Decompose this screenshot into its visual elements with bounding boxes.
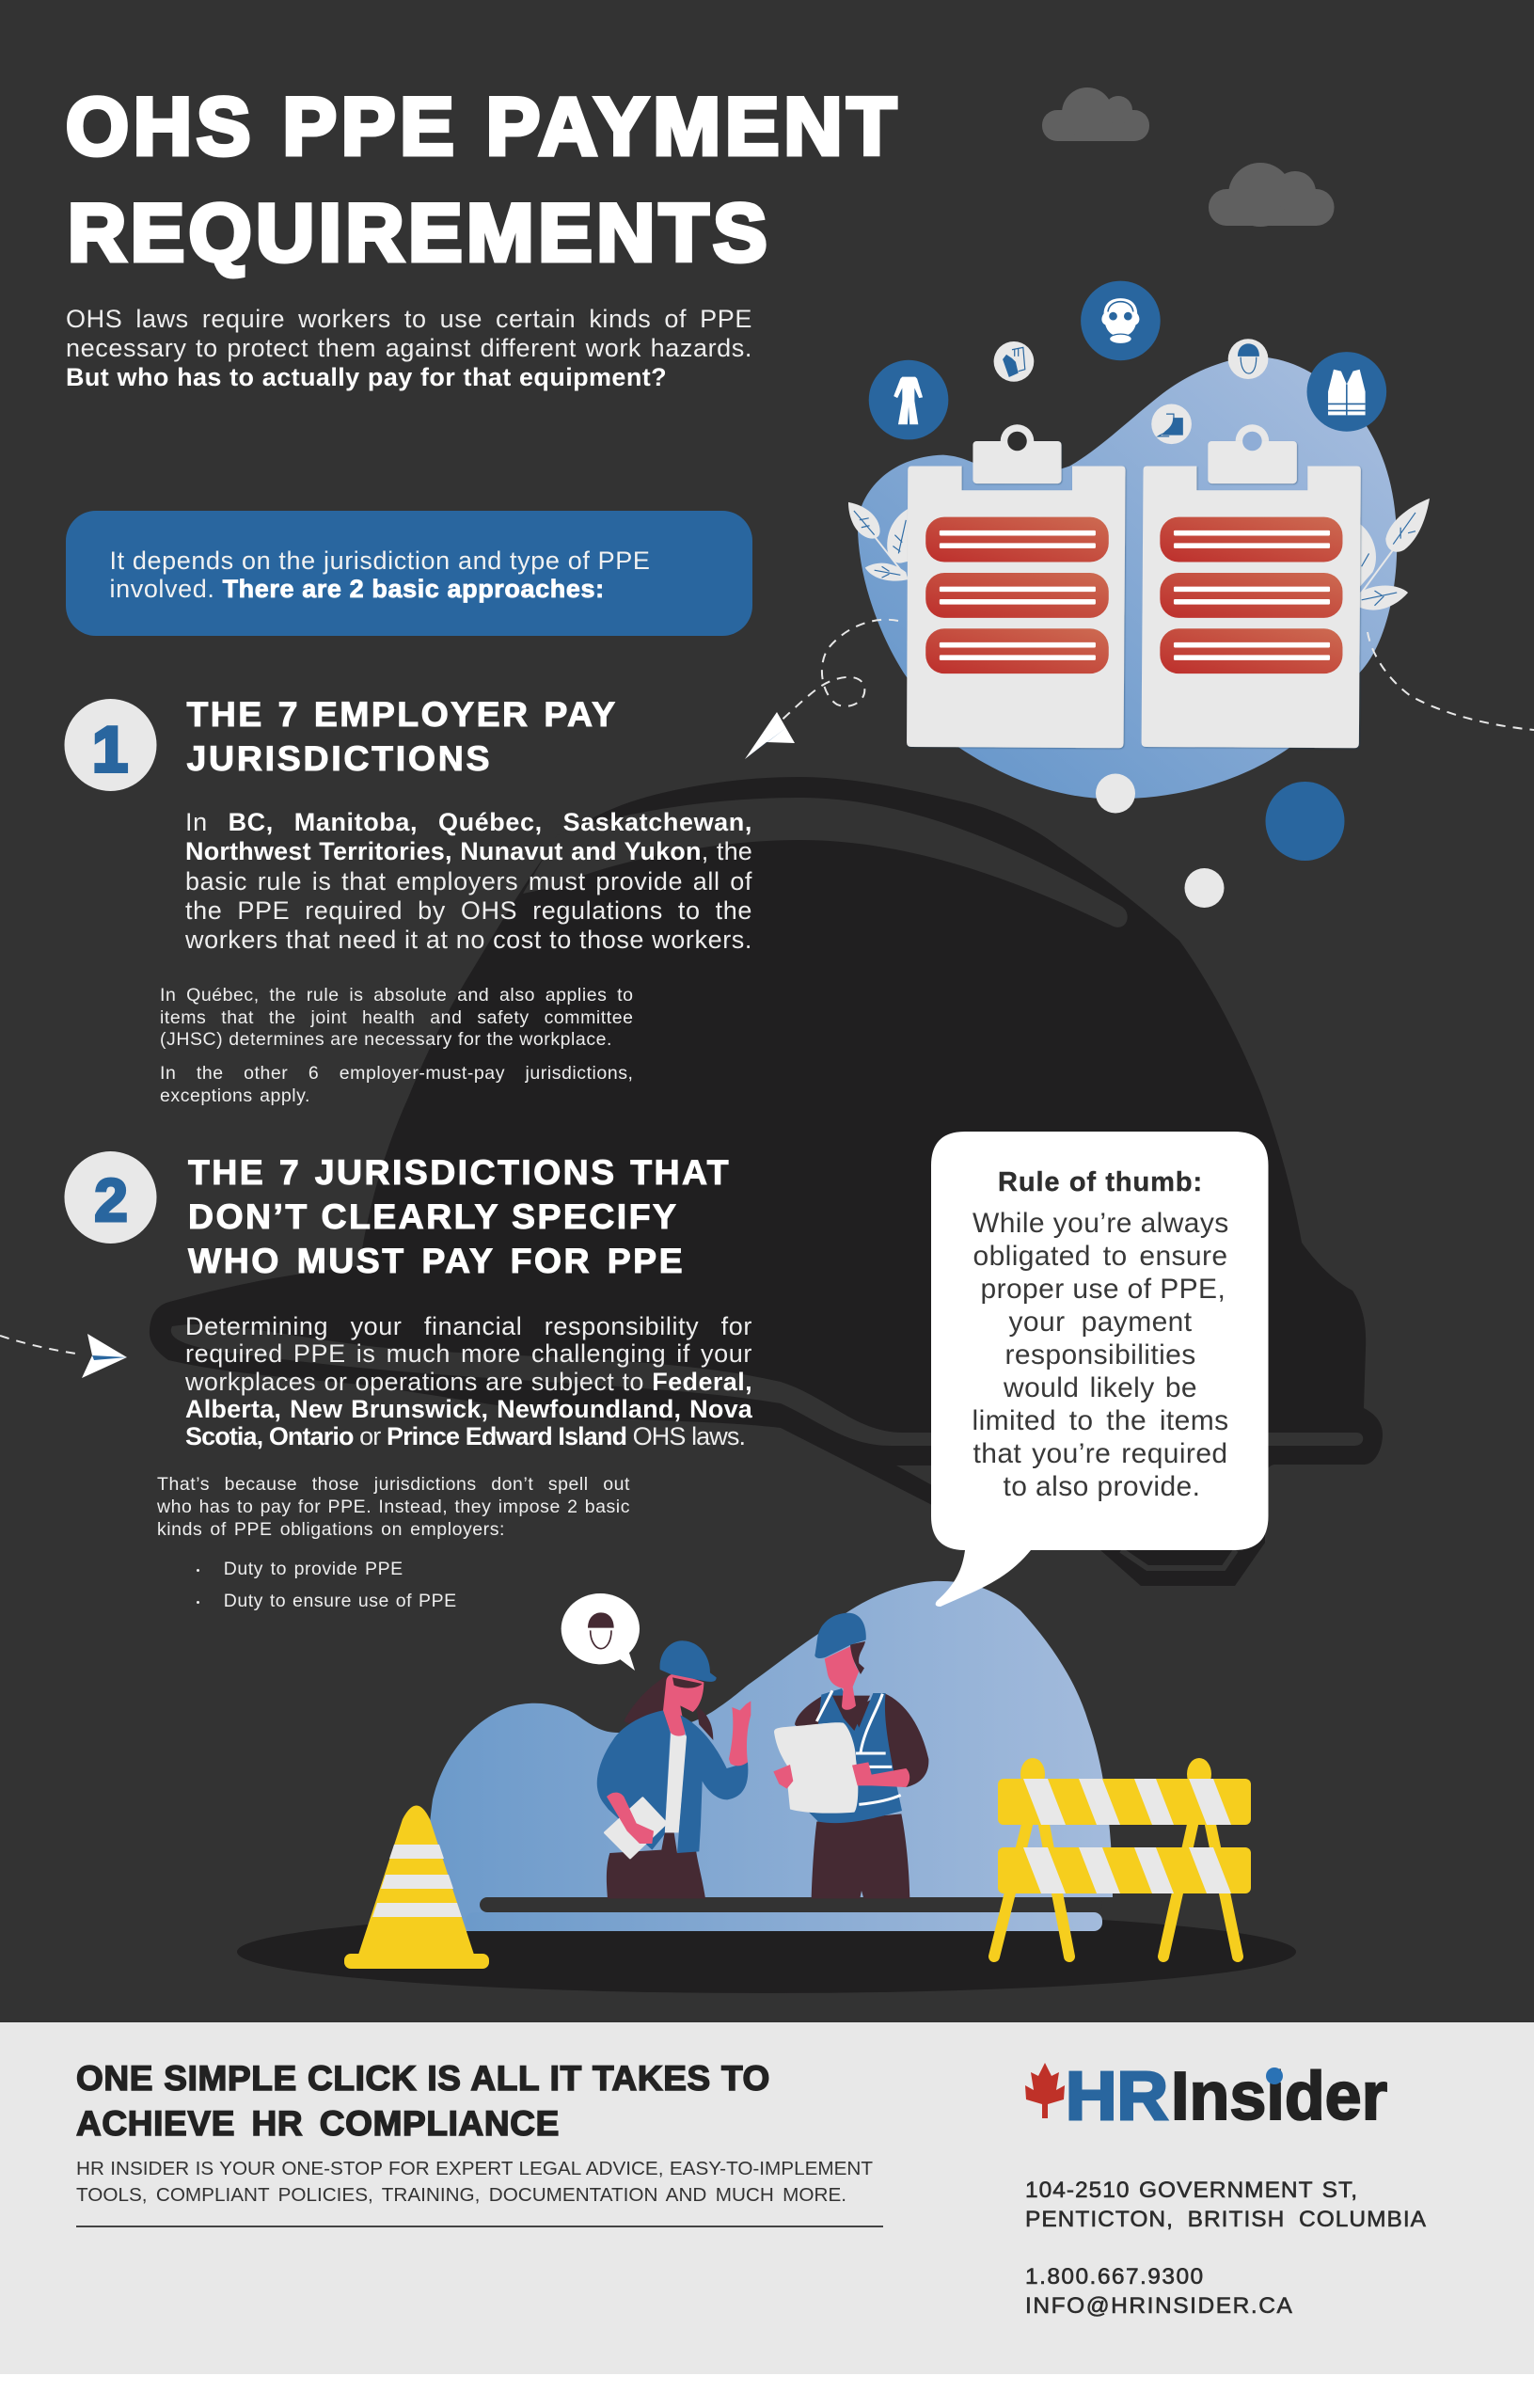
hat underside wedge <box>896 1465 932 1485</box>
logo dot <box>1266 2067 1283 2084</box>
section 1 paragraph: basic rule is that employers must provide all of <box>185 867 752 895</box>
hat brim stripe <box>171 1324 1363 1446</box>
bullet list <box>197 1559 457 1611</box>
rule of thumb text: Rule of thumb: <box>998 1166 1203 1196</box>
heading 2: WHO MUST PAY FOR PPE <box>188 1240 685 1279</box>
contact details: 1.800.667.9300 <box>1025 2264 1205 2289</box>
intro paragraph: OHS laws require workers to use certain kinds of PPE <box>66 305 752 333</box>
ground shadow <box>237 1910 1296 1993</box>
footer headline: ACHIEVE HR COMPLIANCE <box>76 2104 560 2143</box>
section 2 note: who has to pay for PPE. Instead, they impose 2 basic <box>157 1496 630 1516</box>
icon: gas mask <box>1081 281 1161 360</box>
bullet list: Duty to ensure use of PPE <box>224 1591 457 1611</box>
section 2 paragraph: Scotia, Ontario or Prince Edward Island OHS laws. <box>185 1422 745 1450</box>
heading 1: JURISDICTIONS <box>186 738 492 778</box>
section 1 paragraph: Northwest Territories, Nunavut and Yukon, the <box>185 837 752 865</box>
address: 104-2510 GOVERNMENT ST, <box>1025 2178 1358 2203</box>
cloud 2 <box>1209 163 1334 227</box>
section 1 paragraph: the PPE required by OHS regulations to the <box>185 896 752 925</box>
rule of thumb text: proper use of PPE, <box>980 1274 1226 1305</box>
decorative circles <box>1096 773 1345 908</box>
leaves left <box>848 502 909 581</box>
speech bubble with hat icon <box>561 1593 640 1671</box>
number badge 1 <box>64 699 156 791</box>
heading 2 <box>187 1151 731 1279</box>
heading 2: THE 7 JURISDICTIONS THAT <box>188 1151 731 1191</box>
icon: safety boots <box>1151 404 1192 444</box>
clouds <box>1042 87 1334 227</box>
blue pipe <box>466 1912 1102 1931</box>
section 1 exceptions note: exceptions apply. <box>160 1085 310 1106</box>
intro paragraph: But who has to actually pay for that equipment? <box>66 363 667 391</box>
heading 2: DON’T CLEARLY SPECIFY <box>188 1196 678 1236</box>
speech bubble: rule of thumb <box>931 1132 1268 1607</box>
section 2 paragraph: workplaces or operations are subject to Federal, <box>185 1368 752 1396</box>
woman <box>597 1640 751 1898</box>
people <box>561 1593 928 1898</box>
section 2 paragraph <box>185 1312 752 1450</box>
construction scene <box>237 1581 1296 1993</box>
right clipboard <box>1142 424 1361 748</box>
section 1 paragraph <box>185 808 752 954</box>
section 1 note: In Québec, the rule is absolute and also applies to <box>160 985 634 1006</box>
traffic cone <box>344 1806 489 1969</box>
section 2 paragraph: Alberta, New Brunswick, Newfoundland, Nova <box>185 1395 752 1423</box>
rule of thumb text <box>973 1166 1229 1502</box>
left clipboard <box>907 424 1126 748</box>
callout text <box>109 547 651 603</box>
dark pipe <box>480 1897 1102 1912</box>
man <box>773 1613 928 1898</box>
rule of thumb text: would likely be <box>1004 1372 1197 1403</box>
rule of thumb text: obligated to ensure <box>973 1241 1228 1272</box>
number badge 1: 1 <box>92 714 128 785</box>
section 1 note: items that the joint health and safety committee <box>160 1007 634 1028</box>
leaves right <box>1360 499 1430 610</box>
paper plane 2 <box>82 1334 127 1378</box>
blue blob <box>858 356 1397 799</box>
section 1 paragraph: workers that need it at no cost to those workers. <box>185 926 752 954</box>
clipboards illustration <box>848 281 1430 799</box>
hat crown stripe <box>523 798 1128 927</box>
number badge 2: 2 <box>94 1166 128 1234</box>
section 1 note: (JHSC) determines are necessary for the workplace. <box>160 1029 612 1050</box>
number badge 2 <box>64 1151 156 1244</box>
callout text: It depends on the jurisdiction and type of PPE <box>109 547 651 575</box>
rule of thumb text: responsibilities <box>1004 1339 1196 1370</box>
maple leaf <box>1025 2063 1065 2118</box>
blue hills <box>427 1581 1113 1931</box>
title: REQUIREMENTS <box>68 188 771 278</box>
bullet list: Duty to provide PPE <box>224 1559 403 1579</box>
section 2 paragraph: required PPE is much more challenging if your <box>185 1339 752 1368</box>
section 1 exceptions note: In the other 6 employer-must-pay jurisdictions, <box>160 1063 634 1084</box>
rule of thumb text: that you’re required <box>973 1438 1228 1469</box>
logo <box>1025 2059 1387 2134</box>
callout text: involved. There are 2 basic approaches: <box>109 575 605 603</box>
section 1 exceptions note <box>160 1063 634 1106</box>
paper plane 1 <box>745 712 795 759</box>
heading 1: THE 7 EMPLOYER PAY <box>186 694 617 734</box>
rule of thumb text: While you’re always <box>973 1208 1229 1239</box>
icon: coverall suit <box>869 360 948 439</box>
footer description: HR INSIDER IS YOUR ONE-STOP FOR EXPERT LEGAL ADVICE, EASY-TO-IMPLEMENT <box>76 2158 873 2179</box>
section 2 note: That’s because those jurisdictions don’t spell out <box>157 1473 630 1494</box>
heading 1 <box>186 694 617 778</box>
background hard hat silhouette <box>150 777 1383 1586</box>
title: OHS PPE PAYMENT <box>66 82 901 172</box>
section 1 paragraph: In BC, Manitoba, Québec, Saskatchewan, <box>185 808 752 836</box>
rule of thumb text: to also provide. <box>1003 1471 1200 1502</box>
cloud 1 <box>1042 87 1149 141</box>
footer description <box>76 2158 873 2206</box>
icon: safety vest <box>1307 352 1386 432</box>
address: PENTICTON, BRITISH COLUMBIA <box>1025 2207 1427 2232</box>
section 1 note <box>160 985 634 1050</box>
contact details <box>1025 2264 1293 2319</box>
section 2 note <box>157 1473 630 1539</box>
Insider wordmark: Insider <box>1171 2059 1387 2134</box>
icon: hard hat head <box>1228 339 1268 379</box>
footer rule <box>76 2226 883 2227</box>
footer description: TOOLS, COMPLIANT POLICIES, TRAINING, DOCUMENTATION AND MUCH MORE. <box>76 2184 846 2206</box>
contact details: INFO@HRINSIDER.CA <box>1025 2293 1293 2319</box>
HR wordmark: HR <box>1066 2059 1168 2134</box>
rule of thumb text: limited to the items <box>973 1405 1228 1436</box>
title <box>66 82 901 278</box>
icon: gloves <box>994 341 1034 382</box>
address <box>1025 2178 1427 2232</box>
road barricade <box>994 1758 1251 1956</box>
blue callout box <box>66 511 752 636</box>
intro paragraph <box>66 305 752 391</box>
footer headline <box>75 2059 770 2143</box>
section 2 paragraph: Determining your financial responsibility for <box>185 1312 752 1340</box>
section 2 note: kinds of PPE obligations on employers: <box>157 1518 505 1539</box>
intro paragraph: necessary to protect them against different work hazards. <box>66 334 752 362</box>
dashed flight paths <box>0 620 1534 1354</box>
rule of thumb text: your payment <box>1008 1307 1193 1338</box>
hat notch line <box>1121 1550 1236 1568</box>
footer background <box>0 2022 1534 2374</box>
footer headline: ONE SIMPLE CLICK IS ALL IT TAKES TO <box>76 2059 770 2098</box>
